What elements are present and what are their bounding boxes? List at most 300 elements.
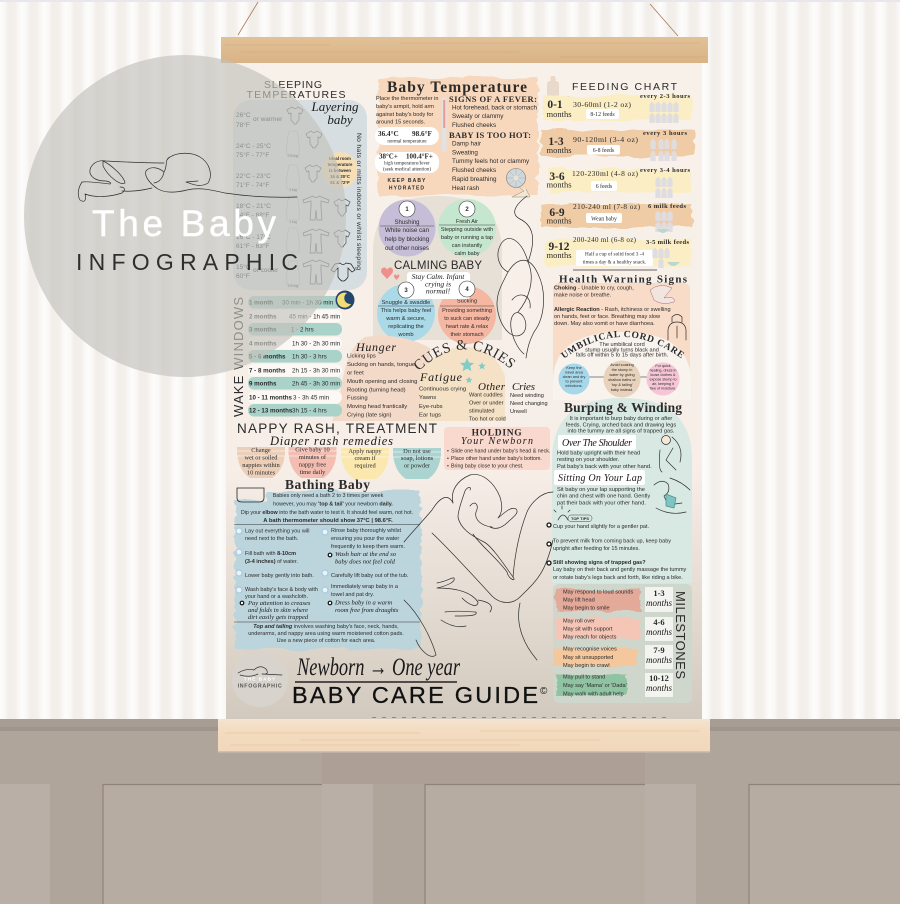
icon: hearts <box>381 268 399 280</box>
row: 9-12 months: months <box>546 250 572 260</box>
text: bath intro: A bath thermometer should show 37°C | 98.6°F. <box>263 518 393 524</box>
row: 6-9 months: 210-240 ml (7-8 oz) <box>573 202 641 211</box>
logo: small circle: THE BABY <box>244 676 276 682</box>
circle: shushing: help by blocking <box>385 236 430 243</box>
circle: loose clothes: healing, dress in <box>650 368 676 372</box>
brush: 4-6 months <box>556 618 639 640</box>
row: 0-1 months: 0-1 <box>547 99 563 111</box>
illustration: fetus line art <box>497 196 544 358</box>
list: tips: Cup your hand slightly for a gentler pat. <box>553 524 649 530</box>
section: sitting on your lap: Sitting On Your Lap <box>558 473 642 484</box>
heading: sleeping temperatures: TEMPERATURES <box>246 89 346 101</box>
row text: 9 months <box>249 380 277 388</box>
age boxes: 4-6 <box>653 617 665 627</box>
notes: script tips: baby does not feel cold <box>335 558 396 566</box>
icon: doctor <box>668 314 686 340</box>
row: 0-1 months: months <box>546 109 572 119</box>
list: hunger: Mouth opening and closing <box>347 379 417 385</box>
row: 1-3 months <box>541 130 695 161</box>
list: left steps: your hand or a washcloth. <box>245 594 308 600</box>
list: fatigue: Eye-rubs <box>419 404 443 410</box>
circle: fresh air: can instantly <box>452 243 483 249</box>
nappy: cream <box>341 448 389 479</box>
row: 1-3 months: 1-3 <box>548 136 564 148</box>
row: 3-6 months: months <box>546 180 572 190</box>
panel: holding your newborn: • <box>447 456 449 462</box>
temperature labels: 64°F - 68°F <box>236 211 269 219</box>
heading: baby temperature: Baby Temperature <box>387 79 527 96</box>
age boxes: months <box>646 683 672 693</box>
brush: 1-3 months <box>556 589 641 612</box>
heading: bathing baby: Bathing Baby <box>285 477 370 492</box>
heading: milestones: MILESTONES <box>673 591 688 679</box>
card: normal temperature: 98.6°F <box>412 130 432 138</box>
list: other cries: Need changing <box>510 401 548 407</box>
illustration: mother holding baby line art <box>404 474 553 660</box>
circle: snuggle and swaddle: Snuggle & swaddle <box>382 300 430 306</box>
row text: 1 month <box>249 300 273 306</box>
heading: calming baby: CALMING BABY <box>394 260 482 272</box>
wainscot wall panelling <box>0 719 900 904</box>
circle: fresh air: calm baby <box>454 251 480 257</box>
text: thermometer instructions: around 15 seconds. <box>376 120 426 126</box>
panel: cues and cries <box>332 336 548 422</box>
list: right steps: ensuring you pour the water <box>331 536 399 542</box>
row: 9-12 months: 200-240 ml (6-8 oz) <box>573 236 637 244</box>
text: bath intro: however, you may 'top & tail' your newborn daily. <box>273 502 393 508</box>
list: fatigue: Yawns <box>419 395 436 401</box>
icon: moon <box>336 290 354 310</box>
row text: 4 months <box>249 340 277 348</box>
clothing icons: 1 tog <box>289 188 297 192</box>
callout: ideal room temperature <box>322 152 358 188</box>
panel: holding your newborn: Slide one hand under baby's head & neck. <box>451 448 550 454</box>
temperature labels: or cooler <box>253 267 279 274</box>
brush: 1-3 months: May lift head <box>563 598 595 604</box>
brush: 10-12 months <box>556 674 627 698</box>
list: other cries: Want cuddles <box>469 392 503 398</box>
heading: nappy rash treatment: NAPPY RASH, TREATMENT <box>237 421 437 436</box>
row text: 10 - 11 months <box>249 394 293 402</box>
row text: 12 - 13 months <box>249 408 293 414</box>
age boxes <box>645 587 673 697</box>
panel: holding your newborn: Bring baby close to your chest. <box>451 464 523 470</box>
heading: diaper rash remedies: Diaper rash remedies <box>269 434 393 448</box>
row: 3-6 months: 120-230ml (4-8 oz) <box>572 169 638 178</box>
list: left steps: Wash baby's face & body with <box>245 587 318 593</box>
temperature labels: 16°C - 17°C <box>236 233 271 241</box>
list: right steps: Rinse baby thoroughly whilst <box>331 528 401 534</box>
circle: avoid soaking <box>604 360 640 398</box>
heading: layering baby <box>311 99 359 127</box>
row: 6-9 months: Wean baby <box>591 216 617 222</box>
heading: cues and cries: CUES & CRIES <box>414 340 516 369</box>
list: tips: To prevent milk from coming back up, keep baby <box>553 538 671 544</box>
text: baby is too hot: Flushed cheeks <box>452 167 496 174</box>
age boxes: months <box>646 627 672 637</box>
panel: burping and winding <box>547 398 692 583</box>
panel: holding your newborn: HOLDING <box>472 428 522 438</box>
section: over the shoulder: resting on your shoulder. <box>557 457 620 463</box>
heading: layering baby: baby <box>327 112 353 127</box>
age boxes: months <box>646 598 672 608</box>
notes: script tips: Wash hair at the end so <box>335 551 397 558</box>
circle: fresh air: baby or running a tap <box>441 235 493 241</box>
text: top and tailing: underarms, and nappy area using warm moistened cotton pads. <box>248 631 404 637</box>
icon: fan <box>506 168 530 197</box>
clothing icons: 0.5 tog <box>288 154 298 158</box>
list: left steps: need next to the bath. <box>245 536 299 542</box>
row: 1-3 months: 6-8 feeds <box>593 147 615 154</box>
nappy: change: wet or soiled <box>244 454 278 462</box>
heading: wake windows: WAKE WINDOWS <box>231 297 246 417</box>
nappy: no soap: Do not use <box>403 448 431 455</box>
panel: holding your newborn: Your Newborn <box>461 436 533 447</box>
list: hunger: Crying (late sign) <box>347 412 392 418</box>
footer fine print <box>372 716 668 718</box>
panel: wake windows <box>231 290 354 417</box>
brush: 4-6 months: May roll over <box>563 618 595 624</box>
poster sheet <box>226 60 702 720</box>
list: right steps: frequently to keep them warm. <box>331 544 405 550</box>
circle: sucking: Providing something <box>442 308 492 314</box>
top wooden hanger <box>221 37 708 63</box>
row: 1-3 months: months <box>546 145 572 155</box>
section: over the shoulder: Pat baby's back with your other hand. <box>557 464 652 470</box>
row text: 30 min - 1h 30 min <box>282 300 334 306</box>
icon: stars <box>460 358 486 383</box>
notes: script tips: Pay attention to creases <box>247 600 311 607</box>
list: other cries: Cries <box>512 381 535 393</box>
circle: avoid soaking: the stump in <box>612 368 632 372</box>
text: top and tailing <box>248 624 404 644</box>
circle: loose clothes: free of moisture. <box>650 386 676 390</box>
icon: small baby <box>238 667 282 676</box>
list: other cries: Need winding <box>510 393 544 399</box>
panel: holding your newborn: Place other hand under baby's bottom. <box>451 456 542 462</box>
number badges: 3 <box>404 288 408 294</box>
circle: snuggle and swaddle: This helps baby feel <box>381 308 431 314</box>
title: baby care guide: BABY CARE GUIDE <box>292 682 538 708</box>
callout: ideal room temperature: is between <box>329 168 351 173</box>
list: left steps: Fill bath with 8-10cm <box>245 551 296 557</box>
heading: health warning signs: Health Warning Signs <box>559 274 688 286</box>
row text: 3 months <box>249 326 277 334</box>
row text <box>249 300 341 414</box>
number badges: 2 <box>465 207 469 213</box>
list: hunger: Hunger <box>355 340 396 354</box>
nappy: change: Change <box>251 447 271 454</box>
circle: keep clean: Keep the <box>566 366 582 370</box>
nappy: free time: Give baby 10 <box>295 446 330 454</box>
row text: 1h 30 - 3 hrs <box>292 354 327 360</box>
list: tips <box>547 523 687 581</box>
callout: stay calm <box>407 272 470 299</box>
illustration: sitting on lap <box>654 478 690 513</box>
nappy: cream: Apply nappy <box>348 448 382 455</box>
list: right steps <box>331 528 409 598</box>
text: cord description: The umbilical cord <box>599 342 645 348</box>
notes: script tips <box>240 551 399 621</box>
row: 0-1 months: every 2-3 hours <box>640 93 690 100</box>
row text: 1 - 2 hrs <box>291 326 314 334</box>
text: bath intro <box>241 493 413 524</box>
circle: avoid soaking: 'top & tailing' <box>611 383 633 387</box>
list: tips: Still showing signs of trapped gas? <box>553 560 646 566</box>
circle: snuggle and swaddle <box>377 284 435 342</box>
row: 1-3 months: every 3 hours <box>643 130 687 137</box>
panel: baby temperature <box>375 78 538 197</box>
circle: avoid soaking: shallow baths or <box>608 378 636 382</box>
row: 3-6 months: 3-6 <box>549 171 565 183</box>
notes: script tips: Dress baby in a warm <box>334 600 392 606</box>
circle: fresh air: Stepping outside with <box>441 227 493 233</box>
list: other cries: Other <box>478 381 506 393</box>
panel: umbilical cord care <box>553 330 690 398</box>
nappy: cream: cream if <box>354 455 376 462</box>
text: thermometer instructions: baby's armpit, hold arm <box>376 104 434 110</box>
notes: script tips: dirt easily gets trapped <box>248 614 309 621</box>
list: tips: upright after feeding for 15 minutes. <box>553 546 640 552</box>
temperature labels: 26°C <box>236 111 251 119</box>
callout: ideal room temperature: Ideal room <box>329 156 351 161</box>
circle: sucking: their stomach <box>450 332 484 338</box>
icon: sleeping baby line art <box>78 153 297 201</box>
nappy: free time: nappy free <box>299 462 326 468</box>
text: cord description <box>576 342 669 358</box>
text: signs of a fever: Flushed cheeks <box>452 122 496 129</box>
circle: fresh air <box>438 199 496 257</box>
section: over the shoulder <box>557 435 652 470</box>
temperature labels: 18°C - 21°C <box>236 202 271 210</box>
text: signs of a fever <box>449 94 537 129</box>
bottom wooden hanger <box>218 719 710 752</box>
title: newborn to one year: Newborn → One year <box>296 654 460 681</box>
temperature labels: 61°F - 63°F <box>236 242 269 250</box>
callout: ideal room temperature: 16 & 20°C <box>330 174 350 179</box>
brand tagline: INFOGRAPHIC <box>76 249 298 275</box>
text: intro: into the tummy are all signs of trapped gas. <box>568 428 675 434</box>
number badges: 1 <box>405 207 409 213</box>
temperature labels: 22°C - 23°C <box>236 172 271 180</box>
row text: 3 - 3h 45 min <box>293 394 330 402</box>
circle: sucking: Sucking <box>457 298 477 304</box>
text: choking: make noise or breathe. <box>554 292 612 298</box>
brush: 10-12 months: May pull to stand <box>563 674 605 680</box>
circle: fresh air: Fresh Air <box>456 219 478 225</box>
circle: keep clean: navel area <box>565 370 584 374</box>
panel: calming baby <box>373 196 502 344</box>
age boxes: 7-9 <box>653 645 665 655</box>
list: fatigue: Continuous crying <box>419 386 466 392</box>
row: 9-12 months: 3-5 milk feeds <box>646 239 689 246</box>
panel: feeding chart <box>541 76 695 268</box>
list: other cries: stimulated <box>469 408 494 414</box>
row: 6-9 months: months <box>546 216 572 226</box>
heading: burping and winding: Burping & Winding <box>564 400 682 415</box>
row text: 3h 15 - 4 hrs <box>292 408 327 414</box>
list: right steps: towel and pat dry. <box>331 592 374 598</box>
circle: snuggle and swaddle: replicating the <box>388 324 424 330</box>
nappy: no soap <box>393 448 441 479</box>
title: baby care guide: © <box>540 686 548 697</box>
list: fatigue <box>419 370 466 418</box>
row: 0-1 months: 30-60ml (1-2 oz) <box>573 100 631 109</box>
brush: 1-3 months: May begin to smile <box>563 606 610 612</box>
brush: 4-6 months: May sit with support <box>563 626 613 632</box>
section: over the shoulder: Over The Shoulder <box>562 438 632 449</box>
text: top and tailing: Top and tailing involves washing baby's face, neck, hands, <box>253 624 399 630</box>
list: other cries: Too hot or cold <box>469 416 506 422</box>
icon: bath tub <box>237 488 264 502</box>
row pills <box>248 296 342 416</box>
list: right steps: Carefully lift baby out of the tub. <box>331 573 409 579</box>
text: baby is too hot <box>449 130 531 192</box>
callout: top tips <box>554 506 592 522</box>
temperature labels: 60°F <box>236 272 250 280</box>
text: intro: It is important to burp baby during or after <box>570 416 672 422</box>
text: baby is too hot: Sweating <box>452 150 478 156</box>
heading: umbilical cord care: UMBILICAL CORD CARE <box>560 330 684 358</box>
row text: 2h 45 - 3h 30 min <box>292 380 341 388</box>
nappy: cream: required <box>354 462 376 470</box>
section: over the shoulder: Hold baby upright with their head <box>557 450 640 456</box>
circle: loose clothes: loose clothes & <box>650 373 676 377</box>
text: signs of a fever: SIGNS OF A FEVER: <box>449 94 537 104</box>
callout: stay calm: crying is <box>425 280 451 288</box>
list: right steps: Immediately wrap baby in a <box>331 584 399 590</box>
circle: shushing <box>378 200 436 256</box>
list: hunger: or feet <box>347 370 364 376</box>
circle: avoid soaking: Avoid soaking <box>610 363 634 367</box>
list: other cries <box>469 381 548 422</box>
logo: small circle <box>232 651 288 707</box>
circle: loose clothes: expose stump to <box>649 378 677 382</box>
temperature labels: or warmer <box>253 116 283 123</box>
text: baby is too hot: Rapid breathing <box>452 176 497 183</box>
text: allergic reaction: Allergic Reaction - Rash, itchiness or swelling <box>554 307 671 313</box>
panel: milestones <box>553 584 692 703</box>
temperature labels: 15°C <box>236 263 251 271</box>
list: hunger: Licking lips <box>347 354 376 360</box>
circle: keep clean: infections. <box>565 384 583 388</box>
row: 6-9 months: 6 milk feeds <box>648 203 686 210</box>
circle: snuggle and swaddle: warm & secure, <box>385 316 426 322</box>
circle: shushing: White noise can <box>385 227 430 234</box>
row text: 7 - 8 months <box>249 368 286 374</box>
nappy: change <box>237 447 285 478</box>
text: allergic reaction: down. May also vomit or have diarrhoea. <box>554 321 655 327</box>
panel: nappy rash treatment <box>237 421 441 479</box>
circle: loose clothes: air, keeping it <box>652 382 674 386</box>
clothing icons: 2.5 tog <box>288 284 298 288</box>
row text: 2h 15 - 3h 30 min <box>292 368 341 374</box>
panel: sleeping temperatures <box>233 79 367 290</box>
text: signs of a fever: Hot forehead, back or stomach <box>452 104 537 112</box>
row text: 5 - 6 months <box>249 354 286 360</box>
panel: holding your newborn: • <box>447 464 449 470</box>
panel: holding your newborn <box>444 427 550 470</box>
notes: script tips: and folds in skin where <box>248 607 308 614</box>
text: no hats or mitts: No hats or mitts indoors or whilst sleeping <box>355 133 362 270</box>
text: cord description: falls off within 5 to 15 days after birth. <box>576 352 669 358</box>
nappy: free time <box>288 446 336 478</box>
text: thermometer instructions <box>376 96 438 126</box>
circle: sucking: to suck can steady <box>444 316 490 322</box>
list: fatigue: Ear tugs <box>419 412 441 418</box>
circle: shushing: out other noises <box>385 245 429 252</box>
number badges <box>398 201 475 298</box>
row text: 45 min - 1h 45 min <box>289 314 341 320</box>
row: 3-6 months: 6 feeds <box>596 183 613 190</box>
circle: avoid soaking: baby instead. <box>611 388 633 392</box>
text: baby is too hot: Tummy feels hot or clammy <box>452 158 530 165</box>
text: intro: feeds. Crying, arched back and drawing legs <box>566 422 676 428</box>
heading: layering baby: Layering <box>311 99 359 114</box>
row: 9-12 months <box>545 236 691 268</box>
panel: holding your newborn: • <box>447 448 449 454</box>
list: hunger: Rooting (turning head) <box>347 388 406 394</box>
list: hunger: Moving head frantically <box>347 404 407 410</box>
brush: 7-9 months: May sit unsupported <box>563 655 613 661</box>
callout: ideal room temperature: temperature <box>328 162 353 167</box>
circle: keep clean: clean and dry <box>563 375 585 379</box>
wallpaper background <box>0 0 900 720</box>
brand name: The Baby <box>92 203 276 244</box>
card: high temperature: 100.4°F+ <box>406 152 433 160</box>
circle: sucking: heart rate & relax <box>446 324 488 330</box>
row: 0-1 months: 8-12 feeds <box>590 111 615 118</box>
nappy: no soap: or powder <box>404 462 431 470</box>
brush: 1-3 months: May respond to loud sounds <box>563 590 633 596</box>
card: high temperature: 38°C+ <box>379 152 398 160</box>
text: baby is too hot: Heat rash <box>452 185 480 192</box>
text: thermometer instructions: against baby's body for <box>376 112 433 118</box>
text: keep baby hydrated: HYDRATED <box>389 186 425 192</box>
row: 3-6 months: every 3-4 hours <box>640 167 690 174</box>
circle: shushing: Shushing <box>394 220 420 226</box>
list: tips: or rotate baby's legs back and forth, like riding a bike. <box>553 575 683 581</box>
panel: bathing baby <box>234 477 421 649</box>
illustration: over the shoulder <box>659 436 681 472</box>
circle: keep clean <box>558 364 590 394</box>
text: choking <box>554 286 634 298</box>
section: sitting on your lap: chin and chest with one hand. Gently <box>557 494 650 500</box>
text: keep baby hydrated: KEEP BABY <box>388 178 426 184</box>
list: left steps <box>245 528 318 600</box>
card: high temperature: (seek medical attention) <box>383 168 431 172</box>
row: 6-9 months <box>541 202 692 233</box>
nappy: change: 10 minutes <box>247 470 276 476</box>
temperature labels: 78°F <box>236 121 250 129</box>
temperature labels: 24°C - 25°C <box>236 142 271 150</box>
row: 6-9 months: 6-9 <box>549 207 565 219</box>
nappy: free time: minutes of <box>299 454 327 461</box>
text: allergic reaction <box>554 307 671 327</box>
callout: ideal room temperature: 61 & 72°F <box>330 180 350 185</box>
row: 0-1 months <box>543 93 691 123</box>
age boxes: months <box>646 655 672 665</box>
card: normal temperature <box>375 127 439 145</box>
nappy: free time: time daily <box>300 469 326 476</box>
brush: 7-9 months <box>553 646 637 669</box>
list: hunger: Sucking on hands, tongue <box>347 362 416 368</box>
circle: sucking <box>438 286 496 344</box>
temperature labels <box>236 111 283 280</box>
icon: choking baby <box>650 285 674 304</box>
list: hunger <box>347 340 417 418</box>
circle: avoid soaking: water by giving <box>609 373 635 377</box>
